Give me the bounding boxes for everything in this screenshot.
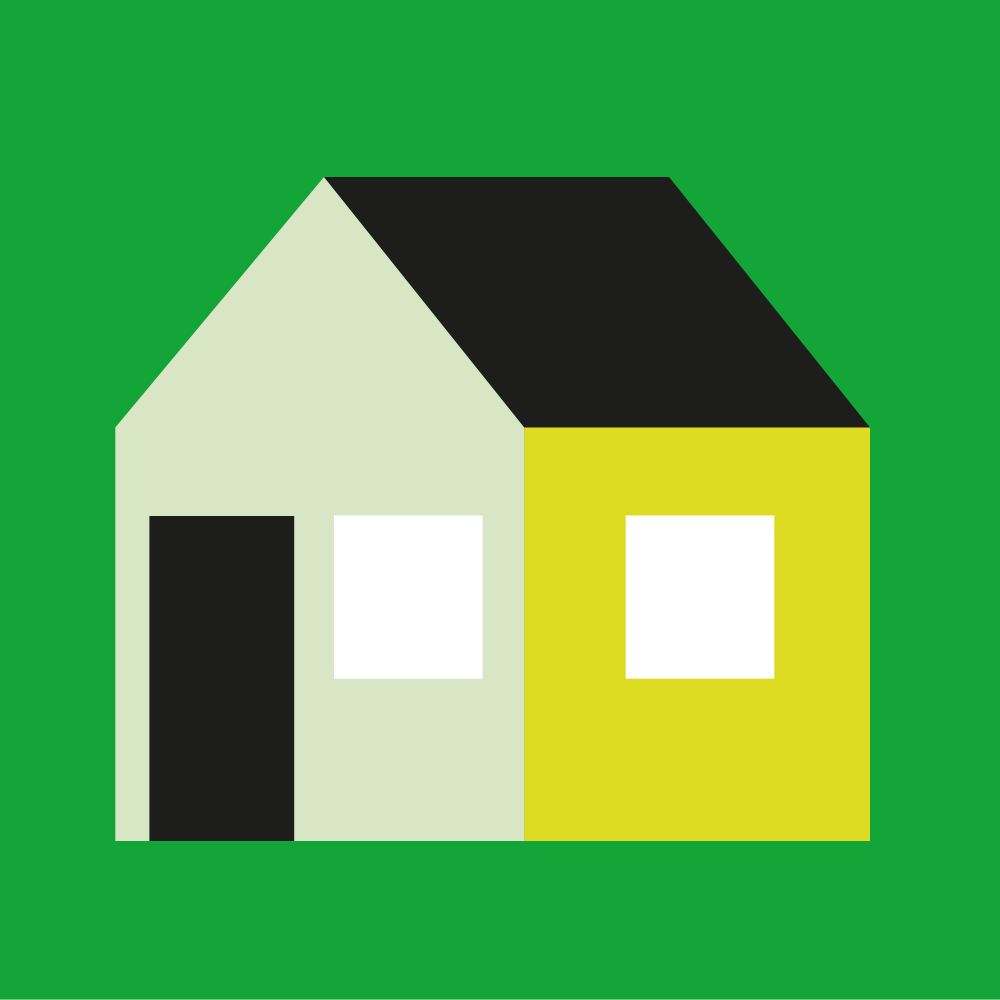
gabled front wall <box>115 177 524 841</box>
side wall <box>524 428 870 841</box>
door <box>149 516 294 841</box>
side window <box>626 516 774 679</box>
front window <box>334 516 483 679</box>
roof <box>324 177 870 428</box>
house <box>115 177 870 841</box>
